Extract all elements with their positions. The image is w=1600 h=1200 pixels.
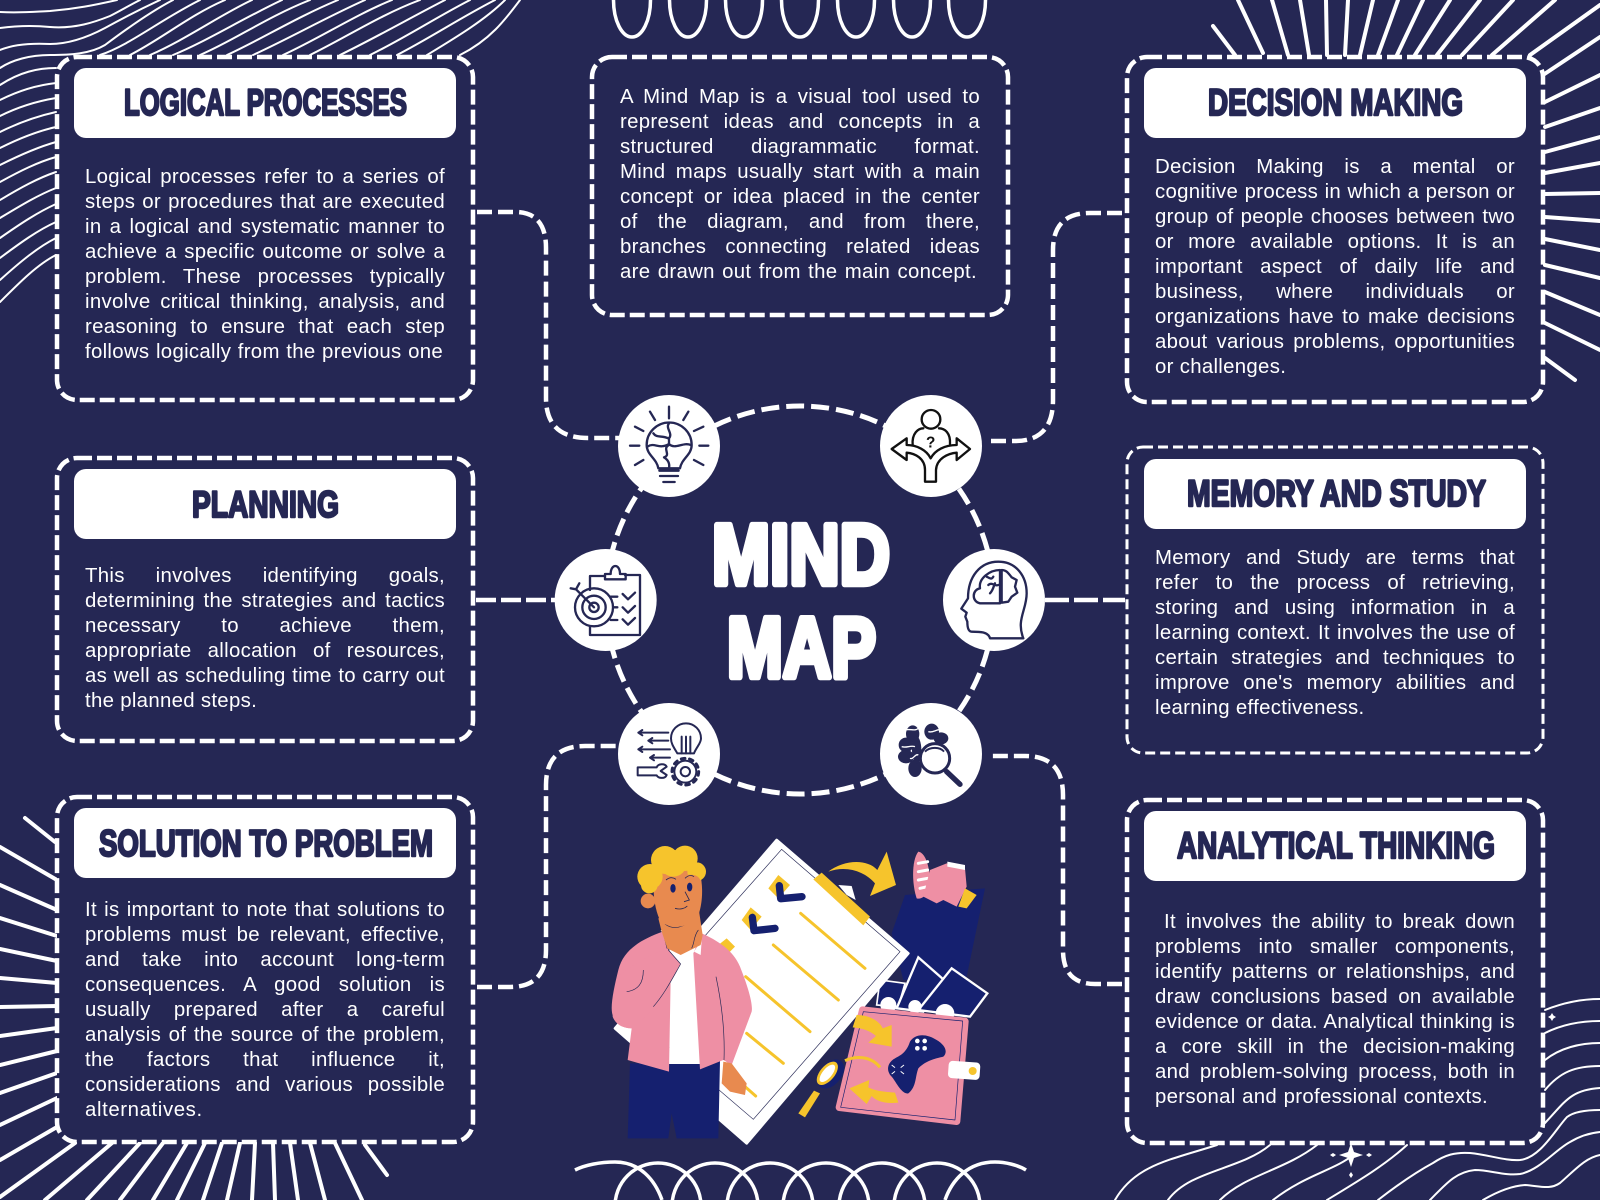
- title: mind map: [712, 508, 890, 696]
- text: mind map definition: are drawn out from the main concept.: [620, 261, 977, 283]
- icon: brain with magnifier: [880, 703, 982, 805]
- panel: logical processes: [54, 54, 476, 402]
- text: solution to problem description: considerations and various possible: [85, 1074, 445, 1096]
- text: decision making description: about various problems, opportunities: [1155, 331, 1515, 353]
- icon: person at crossroads: ?: [926, 434, 935, 451]
- heading: planning: PLANNING: [192, 484, 339, 525]
- text: decision making description: or more available options. It is an: [1155, 231, 1515, 253]
- text: analytical thinking description: personal and professional contexts.: [1155, 1086, 1488, 1108]
- text: planning description: as well as scheduling time to carry out: [85, 665, 445, 687]
- text: planning description: This involves identifying goals,: [85, 565, 445, 587]
- text: memory and study description: improve one's memory abilities and: [1155, 672, 1515, 694]
- text: solution to problem description: and take into account long-term: [85, 949, 445, 971]
- icon: target and checklist: [555, 549, 657, 651]
- yellow arrow: [828, 852, 896, 896]
- decoration: sparkles: [1330, 1013, 1556, 1178]
- text: logical processes description: [85, 166, 445, 363]
- text: logical processes description: steps or procedures that are executed: [85, 191, 445, 213]
- heading: analytical thinking: [1144, 811, 1526, 881]
- text: planning description: appropriate allocation of resources,: [85, 640, 445, 662]
- text: solution to problem description: problems must be relevant, effective,: [85, 924, 445, 946]
- decoration: bottom arcs: [575, 1162, 1026, 1200]
- text: decision making description: or challenges.: [1155, 356, 1286, 378]
- panel: solution to problem: [54, 794, 476, 1144]
- text: decision making description: important aspect of daily life and: [1155, 256, 1515, 278]
- title: mind map: MIND: [712, 508, 890, 603]
- icon: puzzle light bulb: [618, 395, 720, 497]
- text: planning description: the planned steps.: [85, 690, 257, 712]
- text: memory and study description: refer to the process of retrieving,: [1155, 572, 1515, 594]
- coin: [798, 1054, 850, 1117]
- text: logical processes description: follows logically from the previous one: [85, 341, 443, 363]
- icon group coordinates: [555, 395, 1045, 805]
- panel: decision making: [1124, 54, 1546, 404]
- text: decision making description: [1155, 156, 1515, 378]
- text: logical processes description: problem. These processes typically: [85, 266, 445, 288]
- icon: bulb, gear, wrench and arrows: [618, 703, 720, 805]
- text: memory and study description: storing and using information in a: [1155, 597, 1515, 619]
- decoration: top-left wavy lines: [0, 0, 520, 302]
- text: solution to problem description: analysis of the source of the problem,: [85, 1024, 445, 1046]
- text: solution to problem description: [85, 899, 445, 1121]
- heading: memory and study: [1144, 459, 1526, 529]
- grocery bag: [892, 852, 985, 980]
- text: solution to problem description: It is important to note that solutions to: [85, 899, 445, 921]
- text: analytical thinking description: a core skill in the decision-making: [1155, 1036, 1515, 1058]
- text: mind map definition: of the diagram, and from there,: [620, 211, 980, 233]
- text: solution to problem description: usually prepared after a careful: [85, 999, 445, 1021]
- decoration: bottom-left rays: [0, 818, 387, 1200]
- panel: introduction: [590, 54, 1010, 318]
- decoration: top-right rays: [1213, 0, 1600, 380]
- text: mind map definition: Mind maps usually start with a main: [620, 161, 980, 183]
- text: decision making description: organizations have to make decisions: [1155, 306, 1515, 328]
- text: mind map definition: A Mind Map is a visual tool used to: [620, 86, 980, 108]
- text: mind map definition: [620, 86, 980, 283]
- text: mind map definition: represent ideas and concepts in a: [620, 111, 980, 133]
- text: decision making description: group of people chooses between two: [1155, 206, 1515, 228]
- text: memory and study description: learning effectiveness.: [1155, 697, 1364, 719]
- text: decision making description: cognitive process in which a person or: [1155, 181, 1515, 203]
- text: logical processes description: in a logical and systematic manner to: [85, 216, 445, 238]
- text: logical processes description: reasoning to ensure that each step: [85, 316, 445, 338]
- heading: solution to problem: [74, 808, 456, 878]
- text: decision making description: Decision Making is a mental or: [1155, 156, 1515, 178]
- text: analytical thinking description: evidence or data. Analytical thinking is: [1155, 1011, 1515, 1033]
- text: logical processes description: Logical processes refer to a series of: [85, 166, 445, 188]
- text: solution to problem description: alternatives.: [85, 1099, 203, 1121]
- text: analytical thinking description: identify patterns or relationships, and: [1155, 961, 1515, 983]
- illustration: man with checklist, groceries, money and wallet: [612, 840, 987, 1143]
- panel: planning: [54, 456, 476, 744]
- panel: memory and study: [1126, 446, 1544, 754]
- connector: planning to target icon: [476, 598, 558, 602]
- heading: decision making: [1144, 68, 1526, 138]
- connector: logical processes to bulb icon: [477, 212, 620, 438]
- text: memory and study description: learning context. It involves the use of: [1155, 622, 1515, 644]
- text: memory and study description: [1155, 547, 1515, 719]
- man thinking: [612, 846, 752, 1138]
- text: mind map definition: structured diagrammatic format.: [620, 136, 980, 158]
- icon: person at crossroads: [880, 395, 982, 497]
- heading: planning: [74, 469, 456, 539]
- clipboard checklist: [615, 840, 908, 1143]
- text: analytical thinking description: problems into smaller components,: [1155, 936, 1515, 958]
- text: logical processes description: achieve a specific outcome or solve a: [85, 241, 445, 263]
- text: logical processes description: involve critical thinking, analysis, and: [85, 291, 445, 313]
- text: analytical thinking description: [1155, 911, 1515, 1108]
- connector: analytical thinking to brain icon: [988, 756, 1122, 984]
- text: planning description: [85, 565, 445, 712]
- wallet with game controller: [839, 1010, 981, 1121]
- text: analytical thinking description: It involves the ability to break down: [1164, 911, 1515, 933]
- text: decision making description: business, where individuals or: [1155, 281, 1515, 303]
- panel: analytical thinking: [1124, 798, 1546, 1146]
- text: mind map definition: branches connecting related ideas: [620, 236, 980, 258]
- text: solution to problem description: consequences. A good solution is: [85, 974, 445, 996]
- text: planning description: necessary to achieve them,: [85, 615, 445, 637]
- text: memory and study description: Memory and Study are terms that: [1155, 547, 1515, 569]
- connector: solution to gear icon: [477, 746, 620, 987]
- title: mind map: MAP: [727, 601, 876, 696]
- text: analytical thinking description: and problem-solving process, both in: [1155, 1061, 1515, 1083]
- connector: memory to head icon: [1045, 598, 1125, 602]
- text: solution to problem description: the factors that influence it,: [85, 1049, 445, 1071]
- connector: decision making to decision icon: [987, 213, 1122, 441]
- text: analytical thinking description: draw conclusions based on available: [1155, 986, 1515, 1008]
- decoration: bottom-right wavy lines: [1115, 999, 1600, 1200]
- decoration: top oval loops: [614, 0, 986, 37]
- heading: logical processes: [74, 68, 456, 138]
- central dashed ring: [606, 406, 994, 794]
- text: planning description: determining the strategies and tactics: [85, 590, 445, 612]
- money notes: [877, 957, 987, 1023]
- text: mind map definition: concept or idea placed in the center: [620, 186, 980, 208]
- text: memory and study description: certain strategies and techniques to: [1155, 647, 1515, 669]
- icon: head with brain and gear: [943, 549, 1045, 651]
